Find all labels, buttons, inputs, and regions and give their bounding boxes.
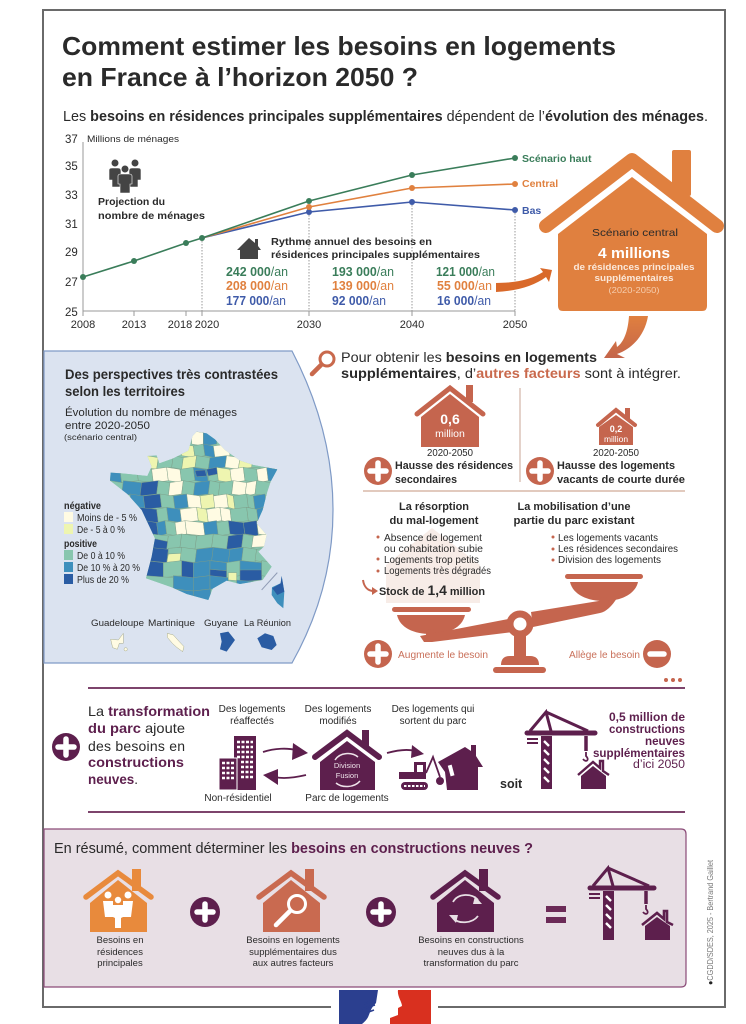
credit: ●CGDD/SDES, 2025 - Bertrand Gaillet — [706, 859, 715, 985]
callout: 0.5 million: supplémentaires — [593, 748, 685, 760]
x axis labels: 2008 — [71, 319, 95, 331]
y axis labels: Millions de ménages — [87, 134, 179, 145]
list: existing stock: partie du parc existant — [514, 515, 635, 527]
arrow: to non-residential — [263, 769, 306, 785]
flow captions: modifiés — [319, 716, 357, 727]
callout: 0.5 million: d’ici 2050 — [633, 759, 685, 771]
flow captions — [204, 704, 474, 804]
choropleth map of France — [107, 430, 284, 608]
y axis labels: 31 — [65, 219, 78, 231]
overseas territories: La Réunion — [244, 618, 291, 629]
watermark house — [386, 528, 480, 603]
house: central scenario — [546, 150, 717, 311]
factor: second homes: 2020-2050 — [427, 448, 473, 459]
house: 0.6 million: 0,6 — [440, 411, 460, 427]
panel: summary: transformation du parc — [423, 958, 519, 969]
house: central scenario: 4 millions — [598, 245, 670, 262]
list: poor housing: du mal-logement — [390, 515, 479, 527]
annual rate heading — [271, 237, 480, 261]
panel: summary: principales — [97, 958, 143, 969]
map legend: Plus de 20 % — [77, 575, 129, 586]
transformation text: des besoins en — [88, 738, 185, 754]
series labels — [522, 153, 592, 217]
house: 0.2 million: 0,2 — [610, 424, 622, 434]
annual rates table: 121 000/an — [436, 265, 495, 279]
house: main residences — [86, 869, 151, 932]
x axis labels: 2050 — [503, 319, 527, 331]
title: en France à l’horizon 2050 ? — [62, 62, 418, 92]
panel: summary: aux autres facteurs — [253, 958, 334, 969]
list: poor housing: La résorption — [399, 501, 469, 513]
house: stock transformation — [433, 869, 498, 932]
transformation text: constructions — [88, 754, 184, 770]
x axis labels: 2030 — [297, 319, 321, 331]
x axis labels: 2020 — [195, 319, 219, 331]
house: 0.2 million: million — [604, 434, 628, 444]
icon: crane with house — [589, 868, 673, 940]
y axis labels: 25 — [65, 307, 78, 319]
arrow: to housing stock — [263, 743, 308, 760]
label: projection — [98, 196, 205, 222]
annual rates table: 208 000/an — [226, 279, 288, 293]
house: 0.6 million: million — [435, 428, 465, 440]
factor: vacant homes: vacants de courte durée — [557, 474, 685, 486]
list: existing stock: La mobilisation d’une — [518, 501, 630, 513]
list: existing stock: Les résidences secondaires — [558, 544, 678, 555]
map heading: selon les territoires — [65, 384, 185, 399]
flow captions: Des logements qui — [392, 704, 474, 715]
callout: 0.5 million — [593, 712, 685, 771]
house: central scenario: de résidences principales — [574, 262, 694, 272]
annual rates table: 193 000/an — [332, 265, 394, 279]
x axis labels — [71, 319, 527, 331]
icon: excavator and demolished house — [399, 745, 483, 790]
label: projection: nombre de ménages — [98, 210, 205, 222]
icon: small house — [237, 238, 261, 259]
y axis labels: 37 — [65, 134, 78, 146]
map legend: De 10 % à 20 % — [77, 563, 140, 574]
house: central scenario: Scénario central — [592, 227, 678, 239]
list: existing stock — [514, 501, 678, 566]
plus badge — [526, 457, 554, 485]
series labels: Scénario haut — [522, 153, 592, 165]
transformation text: du parc ajoute — [88, 720, 185, 736]
annual rates table: 92 000/an — [332, 294, 386, 308]
panel: summary: Besoins en constructions — [418, 935, 524, 946]
plus operator — [190, 897, 220, 927]
flow captions: sortent du parc — [400, 716, 466, 727]
annual rates table: 242 000/an — [226, 265, 288, 279]
transformation text: La transformation — [88, 703, 210, 719]
map subtitle: (scénario central) — [64, 433, 137, 442]
plus operator — [366, 897, 396, 927]
map legend: De 0 à 10 % — [77, 551, 125, 562]
factor: second homes: Hausse des résidences — [395, 460, 513, 472]
factor: vacant homes: 2020-2050 — [593, 448, 639, 459]
icon: housing stock house: Division — [334, 761, 360, 770]
soit: soit — [500, 777, 523, 791]
chart axes — [83, 142, 515, 316]
map legend: De - 5 à 0 % — [77, 525, 125, 536]
Corsica — [272, 576, 284, 608]
annual rates table — [226, 265, 495, 308]
house: central scenario: (2020-2050) — [608, 285, 660, 295]
arrow: down to other factors — [604, 316, 648, 358]
intro sentence: Les besoins en résidences principales supplémentaires dépendent de l’évolution des ménages. — [63, 108, 708, 125]
map subtitle: Évolution du nombre de ménages — [65, 406, 238, 419]
y axis labels: 35 — [65, 161, 78, 173]
x axis labels: 2013 — [122, 319, 146, 331]
map legend — [64, 501, 140, 586]
factor: vacant homes — [526, 408, 685, 486]
icon: crane with house — [527, 712, 609, 789]
icon: buildings — [219, 736, 256, 790]
plus badge — [364, 457, 392, 485]
panel: summary: supplémentaires dus — [249, 947, 337, 958]
flow captions: Non-résidentiel — [204, 793, 272, 804]
list: poor housing: ou cohabitation subie — [384, 544, 483, 555]
x axis labels: 2040 — [400, 319, 424, 331]
reduces need — [569, 640, 671, 668]
series labels: Bas — [522, 205, 541, 217]
x axis labels: 2018 — [168, 319, 192, 331]
other factors heading: Pour obtenir les besoins en logements — [341, 349, 597, 365]
flow captions: réaffectés — [230, 716, 274, 727]
panel: summary: Besoins en logements — [246, 935, 340, 946]
house: other factors — [259, 869, 324, 932]
factor: vacant homes: Hausse des logements — [557, 460, 675, 472]
increases need: Augmente le besoin — [398, 649, 488, 661]
annual rate heading: Rythme annuel des besoins en — [271, 237, 432, 248]
line chart: household projection — [65, 134, 592, 331]
map legend: Moins de - 5 % — [77, 513, 137, 524]
equals sign — [546, 906, 566, 923]
factor: second homes — [364, 385, 513, 486]
increases need — [364, 640, 488, 668]
series lines — [83, 158, 515, 277]
label: projection: Projection du — [98, 196, 165, 208]
y axis labels: 33 — [65, 190, 78, 202]
panel: summary: neuves dus à la — [438, 947, 505, 958]
overseas territories — [91, 618, 291, 652]
logo: Marianne — [339, 990, 431, 1024]
title — [62, 31, 616, 92]
list: existing stock: Les logements vacants — [558, 533, 658, 544]
panel: summary: résidences — [97, 947, 143, 958]
flow captions: Des logements — [219, 704, 285, 715]
reduces need: Allège le besoin — [569, 649, 640, 661]
annual rates table: 177 000/an — [226, 294, 286, 308]
callout: 0.5 million: constructions — [609, 724, 685, 736]
map subtitle: entre 2020-2050 — [65, 420, 150, 432]
callout: 0.5 million: 0,5 million de — [609, 712, 685, 724]
plus badge: transformation — [52, 733, 80, 761]
overseas territories: Guadeloupe — [91, 618, 144, 629]
house: 0.6 million — [417, 385, 483, 447]
list: poor housing: Logements trop petits — [384, 555, 479, 566]
callout: 0.5 million: neuves — [645, 736, 685, 748]
other factors heading — [341, 349, 681, 381]
house: central scenario: supplémentaires — [594, 273, 674, 283]
annual rates table: 55 000/an — [437, 279, 492, 293]
icon: housing stock house: Fusion — [336, 771, 358, 780]
y axis labels — [65, 134, 179, 319]
overseas territories: Martinique — [148, 618, 195, 629]
icon: magnifying glass — [312, 352, 334, 374]
annual rates table: 16 000/an — [437, 294, 491, 308]
panel: summary: Besoins en — [96, 935, 144, 946]
series points — [80, 155, 518, 280]
transformation text — [88, 703, 210, 787]
series labels: Central — [522, 178, 558, 190]
map legend: négative — [64, 501, 101, 512]
transformation text: neuves. — [88, 771, 138, 787]
panel: summary — [44, 829, 686, 987]
annual rate heading: résidences principales supplémentaires — [271, 250, 480, 261]
scale illustration — [392, 574, 643, 673]
icon: household people — [109, 159, 141, 193]
list: poor housing — [376, 501, 491, 577]
title: Comment estimer les besoins en logements — [62, 31, 616, 61]
arrow: to demolition — [387, 745, 424, 758]
map legend: positive — [64, 539, 97, 550]
map heading — [65, 367, 278, 399]
map subtitle — [64, 406, 238, 442]
y axis labels: 27 — [65, 277, 78, 289]
summary heading: En résumé, comment déterminer les besoins en constructions neuves ? — [54, 841, 533, 857]
stock callout: Stock de 1,4 million — [379, 582, 485, 598]
flow captions: Des logements — [305, 704, 371, 715]
factor: second homes: secondaires — [395, 474, 457, 486]
list: poor housing: Logements très dégradés — [384, 566, 491, 577]
icon: housing stock house — [315, 730, 379, 790]
arrow: to central scenario — [496, 268, 552, 292]
map heading: Des perspectives très contrastées — [65, 367, 278, 382]
other factors heading: supplémentaires , d’autres facteurs sont à intégrer. — [341, 365, 681, 381]
annual rates table: 139 000/an — [332, 279, 394, 293]
list: poor housing: Absence de logement — [384, 533, 482, 544]
house: 0.2 million — [598, 408, 635, 445]
list: existing stock: Division des logements — [558, 555, 661, 566]
y axis labels: 29 — [65, 247, 78, 259]
overseas territories: Guyane — [204, 618, 238, 629]
flow captions: Parc de logements — [305, 793, 389, 804]
panel: territories map — [44, 351, 333, 663]
